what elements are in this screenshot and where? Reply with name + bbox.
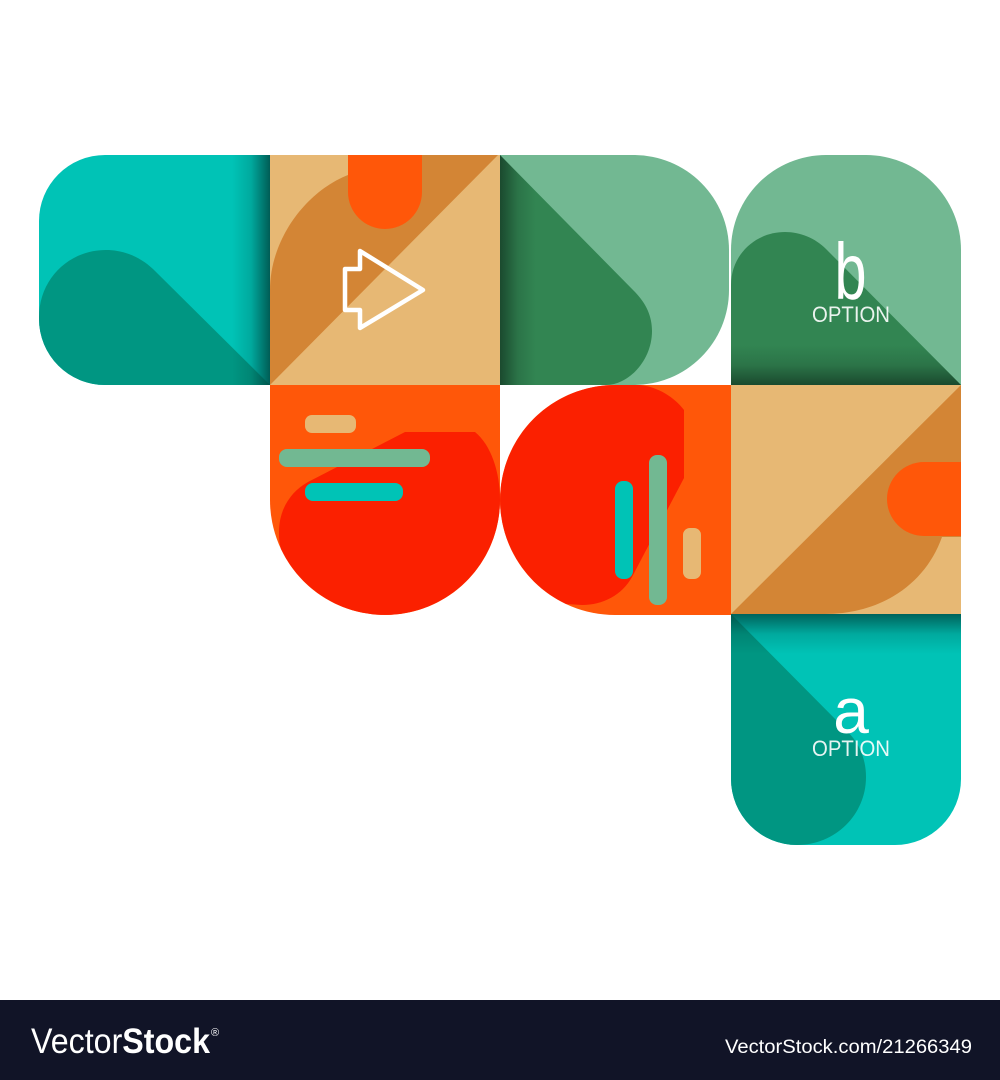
icon: arrow <box>345 251 423 328</box>
teal bar <box>305 483 403 501</box>
panel: teal tile top left <box>39 155 270 385</box>
letter b: b <box>834 227 867 316</box>
panel: orange tile with horizontal bars <box>270 385 500 615</box>
panel: green tile b option <box>731 155 961 385</box>
footer bar <box>0 1000 1000 1080</box>
panel: tan tile right <box>731 385 961 614</box>
panel: tan tile with arrow <box>270 155 500 385</box>
registered mark: ® <box>211 1027 219 1039</box>
green bar <box>279 449 430 467</box>
panel: orange tile with vertical bars <box>500 385 731 615</box>
tan bar <box>305 415 356 433</box>
tan bar <box>683 528 701 579</box>
orange pill tab <box>348 155 422 229</box>
panel: green tile with right rounded corners <box>500 155 729 385</box>
footer logo: VectorStock <box>31 1022 210 1061</box>
orange pill tab <box>887 462 961 536</box>
green bar <box>649 455 667 605</box>
letter a: a <box>833 675 869 747</box>
footer image id: VectorStock.com/21266349 <box>725 1036 972 1058</box>
label: option a: OPTION <box>812 736 890 761</box>
panel: teal tile a option <box>731 614 961 845</box>
label: option b: OPTION <box>812 302 890 327</box>
teal bar <box>615 481 633 579</box>
